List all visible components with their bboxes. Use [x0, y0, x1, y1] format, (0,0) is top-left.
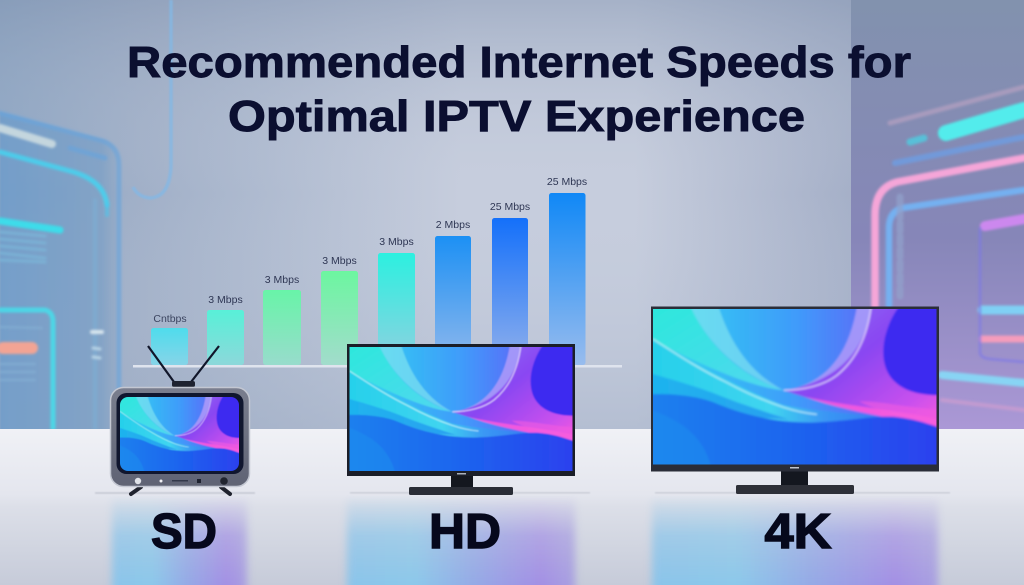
- bar 2: 3 Mbps: [208, 294, 243, 306]
- title line 2: Optimal IPTV Experience: [228, 92, 805, 141]
- right neon interface panel: [820, 0, 1024, 430]
- bar 4: [321, 255, 358, 365]
- label 4K: 4K: [764, 505, 832, 559]
- HD monitor: [347, 344, 575, 495]
- stand: [736, 471, 854, 494]
- tv screen: [116, 393, 244, 474]
- resolution labels: [151, 505, 832, 559]
- tv controls: [135, 477, 228, 485]
- bezel: [651, 306, 939, 472]
- background wall: [0, 0, 1024, 430]
- floor reflections: [108, 500, 942, 585]
- bar 3: [263, 274, 301, 365]
- bar 5: 3 Mbps: [379, 236, 414, 248]
- stand: [409, 476, 513, 495]
- bar 4: 3 Mbps: [322, 255, 357, 267]
- screen: [650, 306, 940, 468]
- SD retro television: [110, 346, 250, 494]
- bezel: [347, 344, 575, 476]
- chart baseline: [133, 365, 622, 368]
- bar 7: [490, 201, 530, 365]
- bar 6: [435, 219, 471, 365]
- left neon interface panel: [0, 0, 186, 430]
- bar 1: [151, 313, 188, 365]
- bar chart: [133, 176, 622, 368]
- tv feet: [131, 487, 230, 494]
- bar 6: 2 Mbps: [436, 219, 470, 231]
- screen: [347, 345, 575, 473]
- bar 3: 3 Mbps: [265, 274, 299, 286]
- 4K monitor: [650, 306, 940, 494]
- floor surface: [0, 429, 1024, 585]
- bar 8: 25 Mbps: [547, 176, 587, 188]
- title: [127, 38, 911, 141]
- bar 2: [207, 294, 244, 365]
- antennas: [148, 346, 219, 387]
- label SD: SD: [151, 505, 217, 559]
- floor contact shadows: [95, 492, 950, 494]
- label HD: HD: [429, 505, 501, 559]
- bar 5: [378, 236, 415, 365]
- bar 7: 25 Mbps: [490, 201, 530, 213]
- tv body: [110, 388, 250, 486]
- logo mark: [790, 467, 799, 468]
- logo mark: [457, 473, 466, 474]
- bar 8: [547, 176, 587, 365]
- bar 1: Cntbps: [153, 313, 187, 325]
- title line 1: Recommended Internet Speeds for: [127, 38, 911, 87]
